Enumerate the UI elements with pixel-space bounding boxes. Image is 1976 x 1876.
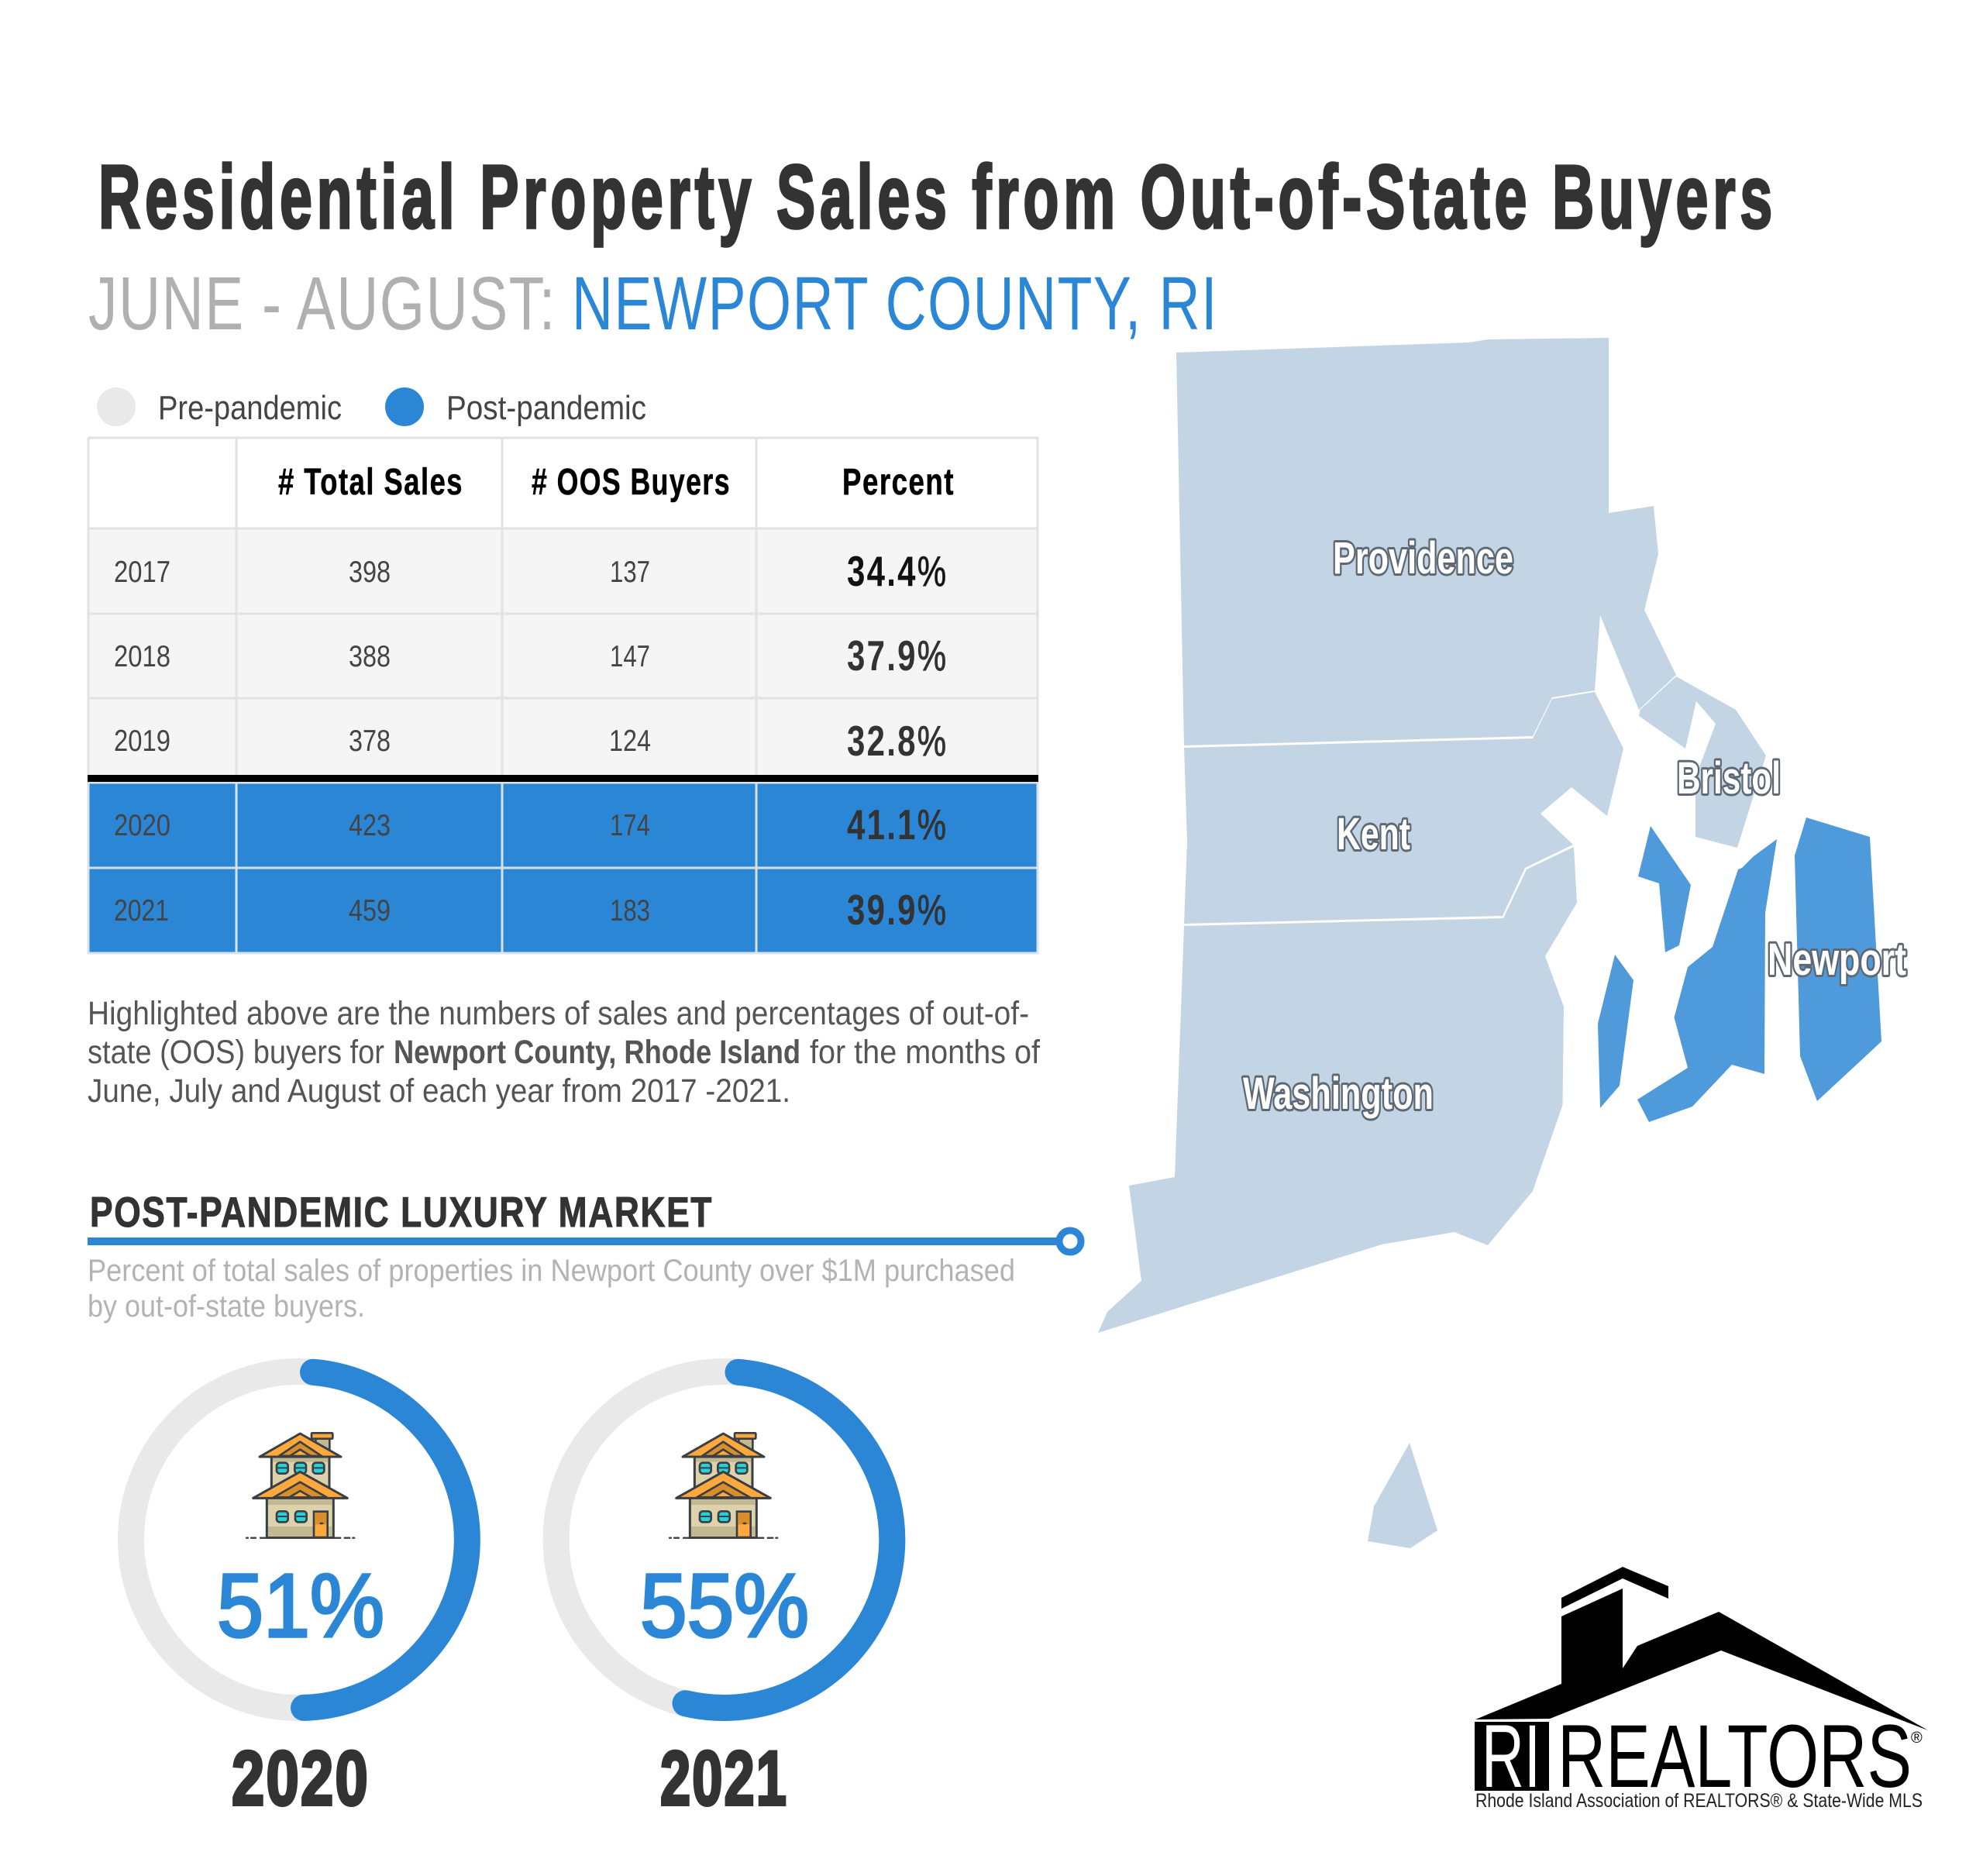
table header [278,462,955,503]
row 2017: 137 [610,556,650,589]
row 2018: 37.9% [847,632,946,680]
logo: RI Realtors [1475,1567,1928,1812]
year 2020: 2020 [232,1735,370,1821]
row 2021: 183 [610,894,650,928]
description paragraph: for the months of [810,1034,1041,1071]
row 2019: 2019 [114,725,170,758]
row 2019: 124 [609,725,651,758]
subtitle: date range: JUNE - AUGUST: [88,261,556,346]
description paragraph: state (OOS) buyers for [88,1034,384,1071]
table header: # Total Sales [278,462,463,503]
description paragraph: Newport County, Rhode Island [394,1034,800,1071]
row 2020: 423 [349,809,391,842]
table header: # OOS Buyers [532,462,731,503]
county: Block Island [1368,1443,1437,1548]
icon: house [670,1433,777,1538]
label: Kent: Kent [1337,809,1410,859]
row 2019 [114,717,946,765]
label: Providence: Providence [1333,533,1513,583]
heading rule with end marker [88,1231,1081,1252]
row 2018: 388 [349,640,391,673]
data table [88,437,1038,953]
label: Newport: Newport [1768,935,1906,985]
county: Kent [1184,692,1623,924]
label: Washington: Washington [1243,1069,1434,1119]
row 2020: 2020 [114,809,170,842]
county: Bristol [1639,676,1766,848]
year 2021: 2021 [660,1735,788,1821]
logo: RI box: RI [1482,1707,1541,1806]
row 2018: 2018 [114,640,170,673]
row 2021 [114,886,946,934]
row 2020: 174 [610,809,650,842]
subtitle [88,261,1218,346]
row 2018: 147 [610,640,650,673]
donut chart: 2020 [131,1372,467,1821]
description paragraph: Highlighted above are the numbers of sales and percentages of out-of- [88,995,1029,1032]
map: Rhode Island counties [1098,338,1906,1548]
legend: Pre-pandemic [158,389,342,427]
county: Washington [1098,847,1577,1333]
donut chart: 2021 [556,1372,893,1821]
legend: Post-pandemic [446,389,646,427]
row 2017: 2017 [114,556,170,589]
value 55%: 55% [640,1555,809,1656]
row 2019: 378 [349,725,391,758]
heading: post-pandemic luxury market: POST-PANDEMIC LUXURY MARKET [90,1188,713,1236]
description paragraph: June, July and August of each year from 2017 -2021. [88,1072,790,1110]
table header: Percent [842,462,955,503]
luxury market description: by out-of-state buyers. [88,1289,365,1324]
subtitle: county: NEWPORT COUNTY, RI [572,261,1218,346]
row 2019: 32.8% [847,717,946,765]
logo: roof and chimney [1475,1589,1928,1730]
row 2020: 41.1% [847,800,946,849]
logo: chimney cap [1561,1567,1668,1609]
luxury market description [88,1254,1015,1324]
label: Bristol: Bristol [1677,753,1781,804]
county: Newport [1598,818,1881,1122]
row 2021: 459 [349,894,391,928]
row 2021: 2021 [114,894,169,928]
county: Providence [1176,338,1676,745]
logo: registered mark: ® [1911,1730,1923,1747]
value 51%: 51% [217,1555,384,1656]
icon: house [246,1433,354,1538]
row 2017: 398 [349,556,391,589]
row 2021: 39.9% [847,886,946,934]
row 2017 [114,547,946,595]
row 2017: 34.4% [847,547,946,595]
description paragraph [88,995,1041,1110]
row 2020 [114,800,946,849]
luxury market description: Percent of total sales of properties in Newport County over $1M purchased [88,1254,1015,1288]
row 2018 [114,632,946,680]
legend [97,387,646,427]
